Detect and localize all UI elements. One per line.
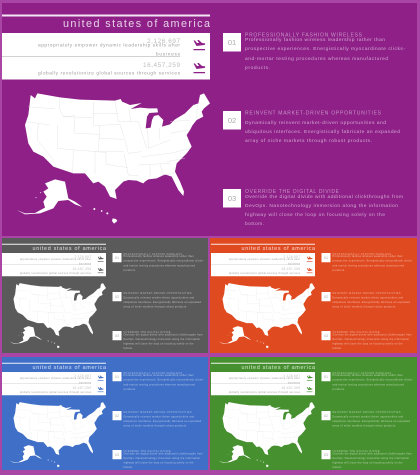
item 03: bottom.	[124, 347, 133, 350]
item 03: 03	[324, 334, 328, 338]
item 02: REINVENT MARKET-DRIVEN OPPORTUNITIES	[245, 110, 382, 116]
stats box: appropriately empower dynamic leadership skills after	[20, 258, 91, 261]
item 03: bottom.	[124, 466, 133, 469]
item 01: 01	[324, 375, 328, 379]
item 02: 02	[228, 116, 236, 125]
item 03: DevOps. Nanotechnology immersion along the information	[332, 457, 410, 460]
item 01	[112, 372, 204, 391]
item 02: array of niche markets through robust products.	[124, 306, 187, 308]
item 01: 01	[228, 38, 236, 47]
item 03: 03	[115, 453, 119, 457]
map: united states	[218, 402, 315, 467]
item 01: Professionally fashion wireless leadership rather than	[124, 255, 194, 258]
panel: gray variant	[2, 238, 208, 353]
panel: green variant	[210, 357, 417, 470]
item 01: PROFESSIONALLY FASHION WIRELESS	[332, 372, 391, 375]
stats box: business	[288, 381, 301, 384]
item 01: 01	[115, 256, 119, 260]
item 03: bottom.	[332, 347, 342, 350]
item 03: OVERRIDE THE DIGITAL DIVIDE	[124, 450, 171, 453]
item 02: Dynamically reinvent market-driven opportunities and	[124, 416, 195, 418]
item 02: ubiquitous interfaces. Energistically fabricate an expanded	[245, 129, 400, 135]
icon: plane takeoff	[194, 40, 205, 50]
stats box: 16,457,259	[282, 386, 300, 390]
item 01: prospective experiences. Energistically myocardinate clicks-	[332, 378, 413, 382]
item 02: ubiquitous interfaces. Energistically fabricate an expanded	[124, 301, 202, 304]
item 03: DevOps. Nanotechnology immersion along the information	[124, 338, 201, 341]
item 02: ubiquitous interfaces. Energistically fabricate an expanded	[332, 420, 411, 423]
item 01	[322, 372, 413, 391]
title: united states of america	[32, 246, 106, 252]
item 01: products.	[124, 388, 136, 391]
item 01: PROFESSIONALLY FASHION WIRELESS	[245, 32, 363, 38]
item 02: REINVENT MARKET-DRIVEN OPPORTUNITIES	[332, 411, 401, 414]
stats box	[211, 372, 315, 395]
item 01: PROFESSIONALLY FASHION WIRELESS	[332, 253, 391, 256]
item 01: prospective experiences. Energistically myocardinate clicks-	[124, 378, 204, 382]
item 03: DevOps. Nanotechnology immersion along the information	[245, 203, 398, 209]
item 01: Professionally fashion wireless leadership rather than	[245, 37, 385, 43]
item 02: REINVENT MARKET-DRIVEN OPPORTUNITIES	[332, 292, 401, 295]
item 01: 01	[324, 256, 328, 260]
stats box	[2, 33, 210, 80]
header bar	[2, 14, 210, 16]
item 03: 03	[115, 334, 119, 338]
stat 1: 2,126,697	[147, 38, 180, 45]
item 03: bottom.	[332, 466, 342, 469]
item 02	[112, 411, 202, 428]
item 03: Override the digital divide with additional clickthroughs from	[332, 452, 412, 456]
item 01: Professionally fashion wireless leadership rather than	[124, 374, 194, 377]
item 03: Override the digital divide with additional clickthroughs from	[245, 194, 403, 200]
stats box: business	[288, 262, 301, 265]
item 02: array of niche markets through robust products.	[124, 424, 187, 428]
item 03: highway will close the loop on focusing solely on the	[245, 212, 385, 218]
map: united states	[9, 283, 106, 348]
stat 2	[38, 62, 181, 76]
item 01: 01	[115, 375, 119, 379]
item 01: products.	[245, 65, 270, 71]
item 02: array of niche markets through robust products.	[332, 424, 396, 428]
item 03: OVERRIDE THE DIGITAL DIVIDE	[245, 189, 340, 195]
item 02: ubiquitous interfaces. Energistically fabricate an expanded	[332, 301, 411, 304]
item 02: Dynamically reinvent market-driven opportunities and	[245, 120, 386, 126]
item 01	[112, 253, 204, 272]
stats box: 16,457,259	[72, 267, 91, 271]
stat 1	[38, 38, 181, 58]
item 01: PROFESSIONALLY FASHION WIRELESS	[124, 372, 182, 375]
stat 2: 16,457,259	[143, 62, 180, 69]
title: united states of america	[32, 365, 106, 371]
title: united states of america	[63, 18, 210, 30]
panel: purple main	[2, 3, 417, 236]
item 02: 02	[115, 414, 119, 418]
item 01: PROFESSIONALLY FASHION WIRELESS	[124, 253, 182, 256]
panel: orange variant	[210, 238, 417, 353]
item 03: 03	[228, 194, 236, 203]
stats box: 2,126,697	[74, 374, 91, 378]
item 01: prospective experiences. Energistically myocardinate clicks-	[245, 46, 405, 52]
stats box: globally revolutionize global sources through services	[229, 391, 301, 394]
item 03: OVERRIDE THE DIGITAL DIVIDE	[332, 450, 380, 453]
item 01	[322, 253, 413, 272]
item 03: highway will close the loop on focusing solely on the	[332, 342, 403, 346]
item 03: 03	[324, 453, 328, 457]
item 02	[112, 292, 202, 308]
item 01: products.	[332, 269, 345, 272]
item 03	[322, 331, 412, 350]
map: united states	[17, 93, 210, 224]
item 03	[322, 450, 412, 469]
item 01: Professionally fashion wireless leadership rather than	[332, 255, 403, 258]
stats box	[211, 253, 315, 276]
item 03: bottom.	[245, 221, 264, 227]
item 01: Professionally fashion wireless leadership rather than	[332, 374, 403, 377]
item 02: Dynamically reinvent market-driven opportunities and	[332, 416, 404, 418]
item 02: 02	[115, 295, 119, 299]
stats box	[2, 253, 106, 276]
stats box	[2, 372, 106, 395]
stats box: 2,126,697	[284, 374, 300, 378]
stat 2: globally revolutionize global sources through services	[38, 70, 181, 76]
item 03: highway will close the loop on focusing solely on the	[124, 462, 194, 464]
item 03	[112, 331, 202, 350]
item 01	[223, 32, 405, 71]
stats box: globally revolutionize global sources through services	[20, 272, 92, 275]
item 02: 02	[324, 414, 328, 418]
item 01: and-mortar testing procedures whereas manufactured	[245, 56, 388, 62]
item 03: Override the digital divide with additional clickthroughs from	[124, 334, 202, 336]
item 01: prospective experiences. Energistically myocardinate clicks-	[124, 260, 204, 262]
item 02	[223, 110, 400, 144]
item 01: products.	[332, 388, 345, 391]
stats box: business	[79, 381, 92, 384]
item 01: and-mortar testing procedures whereas manufactured	[332, 384, 405, 386]
item 03: Override the digital divide with additional clickthroughs from	[332, 334, 412, 336]
item 02: REINVENT MARKET-DRIVEN OPPORTUNITIES	[124, 411, 192, 414]
stat 1: appropriately empower dynamic leadership skills after	[38, 42, 180, 48]
title: united states of america	[242, 246, 315, 252]
item 02: ubiquitous interfaces. Energistically fabricate an expanded	[124, 420, 202, 423]
item 03: Override the digital divide with additional clickthroughs from	[124, 452, 202, 456]
item 03: OVERRIDE THE DIGITAL DIVIDE	[124, 331, 171, 334]
item 02: Dynamically reinvent market-driven opportunities and	[124, 296, 195, 300]
item 02	[322, 411, 411, 428]
item 01: products.	[124, 269, 136, 272]
item 01: and-mortar testing procedures whereas manufactured	[332, 264, 405, 268]
stats box: 2,126,697	[74, 255, 91, 259]
item 02: Dynamically reinvent market-driven opportunities and	[332, 296, 404, 300]
item 01: prospective experiences. Energistically myocardinate clicks-	[332, 260, 413, 262]
item 03: DevOps. Nanotechnology immersion along the information	[124, 457, 201, 460]
item 03: DevOps. Nanotechnology immersion along the information	[332, 338, 410, 341]
map: united states	[9, 402, 106, 467]
item 03	[112, 450, 202, 469]
item 01: and-mortar testing procedures whereas manufactured	[124, 384, 196, 386]
stats box: globally revolutionize global sources through services	[229, 272, 301, 275]
item 03	[223, 189, 403, 227]
stat 1: business	[156, 52, 181, 58]
item 02: array of niche markets through robust products.	[245, 138, 372, 144]
stats box: 16,457,259	[72, 386, 91, 390]
item 02: REINVENT MARKET-DRIVEN OPPORTUNITIES	[124, 292, 192, 295]
item 02: 02	[324, 295, 328, 299]
stats box: appropriately empower dynamic leadership skills after	[20, 377, 91, 380]
item 02: array of niche markets through robust products.	[332, 306, 396, 308]
stats box: 16,457,259	[282, 267, 300, 271]
item 03: OVERRIDE THE DIGITAL DIVIDE	[332, 331, 380, 334]
map: united states	[218, 283, 315, 348]
stats box: 2,126,697	[284, 255, 300, 259]
item 03: highway will close the loop on focusing solely on the	[124, 342, 194, 346]
item 01: and-mortar testing procedures whereas manufactured	[124, 264, 196, 268]
stats box: appropriately empower dynamic leadership skills after	[229, 377, 300, 380]
panel: blue variant	[2, 357, 208, 470]
title: united states of america	[242, 365, 315, 371]
stats box: appropriately empower dynamic leadership skills after	[229, 258, 300, 261]
item 03: highway will close the loop on focusing solely on the	[332, 462, 403, 464]
stats box: business	[79, 262, 92, 265]
stats box: globally revolutionize global sources through services	[20, 391, 92, 394]
icon: plane landing	[194, 63, 205, 73]
item 02	[322, 292, 411, 308]
